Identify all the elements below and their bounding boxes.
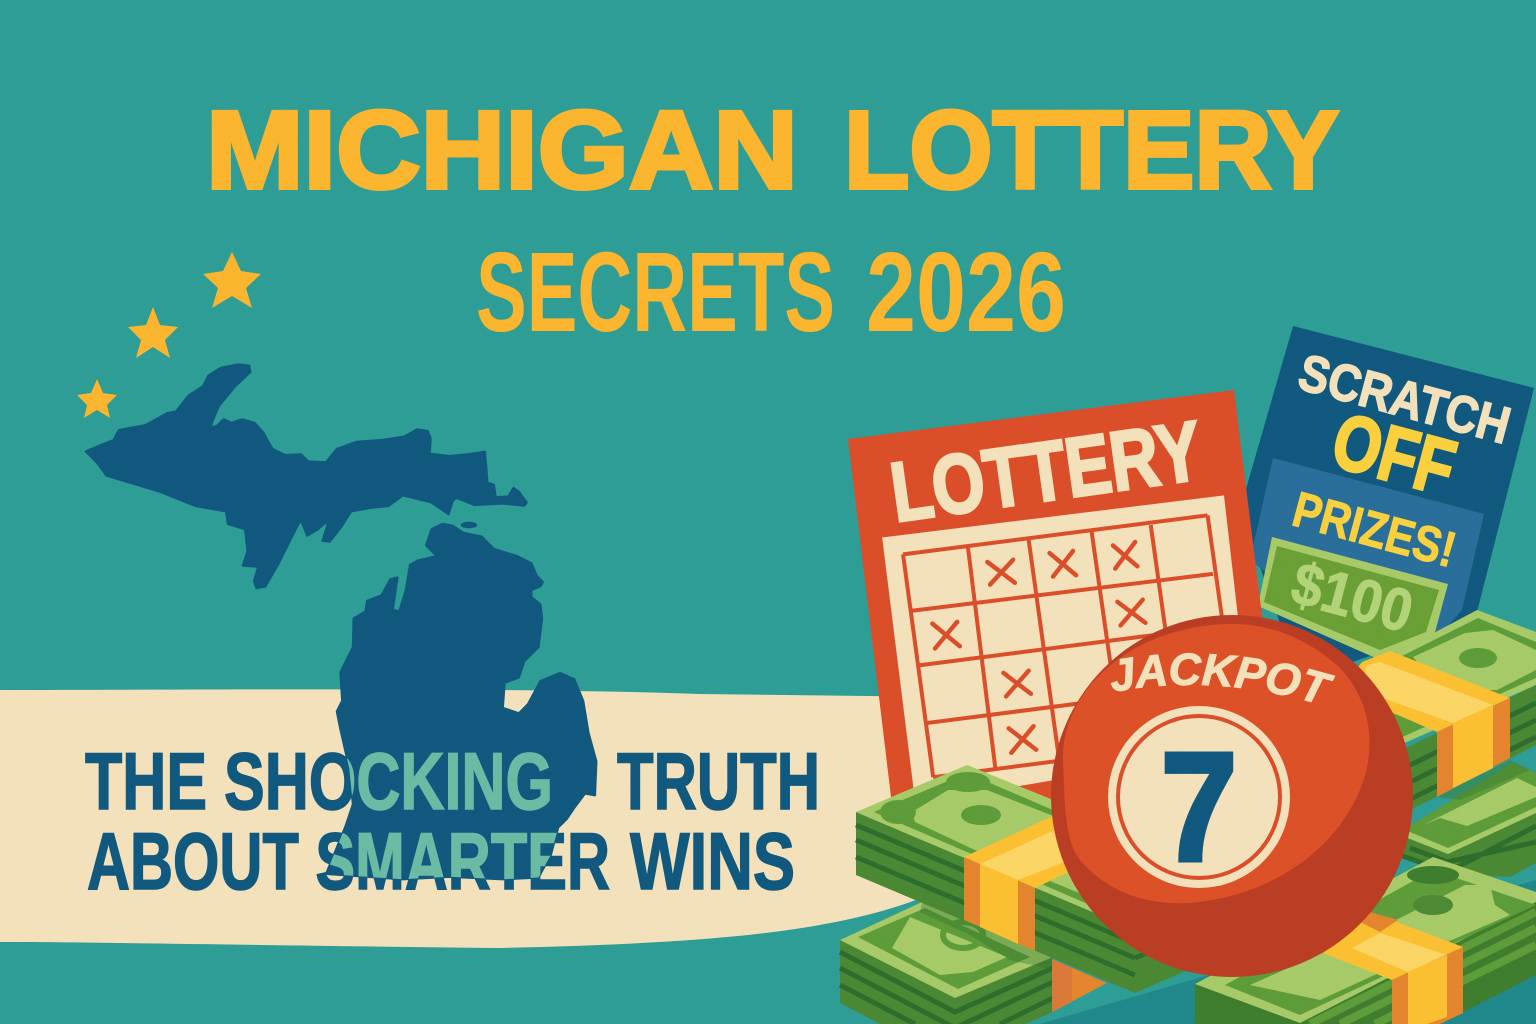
banner headline: TRUTH: [617, 737, 820, 827]
banner headline: ABOUT SMARTER: [87, 817, 610, 907]
headline overlap on map: ABOUT SMARTER: [87, 817, 610, 907]
money stack: bottom right: [1195, 857, 1536, 1024]
ball number badge: [1108, 706, 1290, 888]
orange band piece: [1052, 959, 1107, 1012]
headline overlap on map: THE SHOCKING: [85, 737, 553, 827]
subtitle: Secrets 2026: 2026: [866, 229, 1066, 355]
banner headline: WINS: [630, 817, 795, 907]
scratch-off ticket: $100: [1285, 549, 1420, 645]
scratch-off ticket: OFF: [1324, 396, 1464, 512]
banner headline: [85, 737, 820, 907]
subtitle: Secrets 2026: SECRETS: [476, 229, 835, 355]
money band: back right: [1340, 651, 1510, 797]
small island: [462, 523, 476, 527]
jackpot ball: 7: [1161, 721, 1237, 893]
lottery ticket: [848, 390, 1290, 830]
ticket number grid: [882, 495, 1253, 804]
headline overlap on map: [326, 752, 557, 880]
money stack: front left: [856, 765, 1250, 993]
title: Michigan Lottery: [206, 89, 1339, 212]
cream banner: [0, 689, 960, 948]
money band: bottom right: [1323, 912, 1463, 1024]
jackpot ball: JACKPOT: [1110, 652, 1336, 702]
money stack: back right: [1300, 610, 1536, 825]
lower peninsula: [326, 524, 596, 879]
title: Michigan Lottery: MICHIGAN: [206, 89, 798, 212]
money band: front left: [964, 815, 1125, 951]
money stack: middle right: [1395, 760, 1536, 877]
scratch-off ticket: PRIZES!: [1287, 481, 1462, 578]
scratch-off ticket: [1240, 326, 1534, 680]
dark teal floor shadow: [1040, 880, 1536, 1024]
money stack: bottom left: [840, 902, 1053, 1024]
ticket crosses: [932, 542, 1145, 753]
upper peninsula: [86, 364, 527, 588]
jackpot ball: [1051, 615, 1413, 977]
banner headline: THE SHOCKING: [85, 737, 553, 827]
map of Michigan: [86, 364, 596, 879]
lottery ticket: LOTTERY: [885, 403, 1207, 540]
title: Michigan Lottery: LOTTERY: [844, 89, 1339, 212]
icon: three stars: [77, 252, 261, 418]
